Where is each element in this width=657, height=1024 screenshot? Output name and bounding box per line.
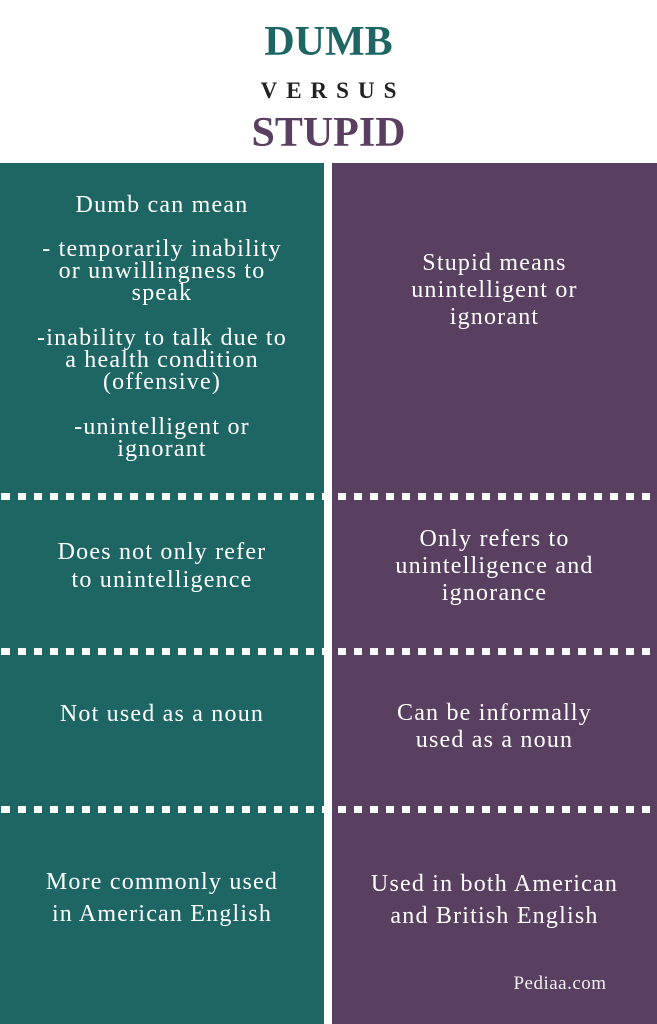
text: dumb meanings: ignorant — [117, 436, 207, 462]
text: dumb row 4: More commonly used — [46, 869, 278, 895]
text: stupid row 2: ignorance — [442, 580, 547, 606]
text: stupid row 2: Only refers to — [419, 526, 570, 552]
subtitle: VERSUS: VERSUS — [261, 78, 405, 103]
text: dumb meanings — [37, 192, 287, 462]
text: dumb meanings: (offensive) -unintelligent or — [74, 369, 250, 440]
text: stupid meaning: Stupid means — [422, 250, 567, 276]
text: dumb row 2: to unintelligence — [71, 567, 253, 593]
title: DUMB: DUMB — [264, 19, 393, 65]
text: dumb row 2 — [58, 539, 266, 593]
logo: Pediaa.com: Pediaa.com — [513, 973, 607, 994]
text: dumb row 4 — [46, 869, 278, 927]
text: stupid meaning: ignorant — [450, 304, 539, 330]
text: stupid meaning — [411, 250, 578, 330]
divider dots 1 — [0, 493, 657, 500]
text: dumb meanings: or unwillingness to — [59, 258, 265, 284]
text: stupid row 4: and British English — [390, 903, 599, 929]
text: stupid row 4 — [371, 871, 618, 929]
text: stupid row 2: unintelligence and — [395, 553, 594, 579]
divider dots 2 — [0, 648, 657, 655]
text: stupid meaning: unintelligent or — [411, 277, 578, 303]
text: dumb row 4: in American English — [52, 901, 272, 927]
text: dumb meanings: speak -inability to talk due to — [37, 280, 287, 351]
text: dumb meanings: a health condition — [65, 347, 259, 373]
text: dumb row 3: Not used as a noun — [60, 701, 264, 727]
divider dots 3 — [0, 806, 657, 813]
text: stupid row 2 — [395, 526, 594, 606]
panel: stupid column — [332, 163, 657, 1024]
panel: dumb column — [0, 163, 324, 1024]
text: dumb meanings: Dumb can mean - temporarily inability — [42, 192, 282, 262]
text: stupid row 3: Can be informally — [397, 700, 592, 726]
title: STUPID: STUPID — [251, 110, 406, 156]
text: dumb row 2: Does not only refer — [58, 539, 266, 565]
text: stupid row 3: used as a noun — [416, 727, 573, 753]
text: stupid row 4: Used in both American — [371, 871, 618, 897]
text: stupid row 3 — [397, 700, 592, 753]
